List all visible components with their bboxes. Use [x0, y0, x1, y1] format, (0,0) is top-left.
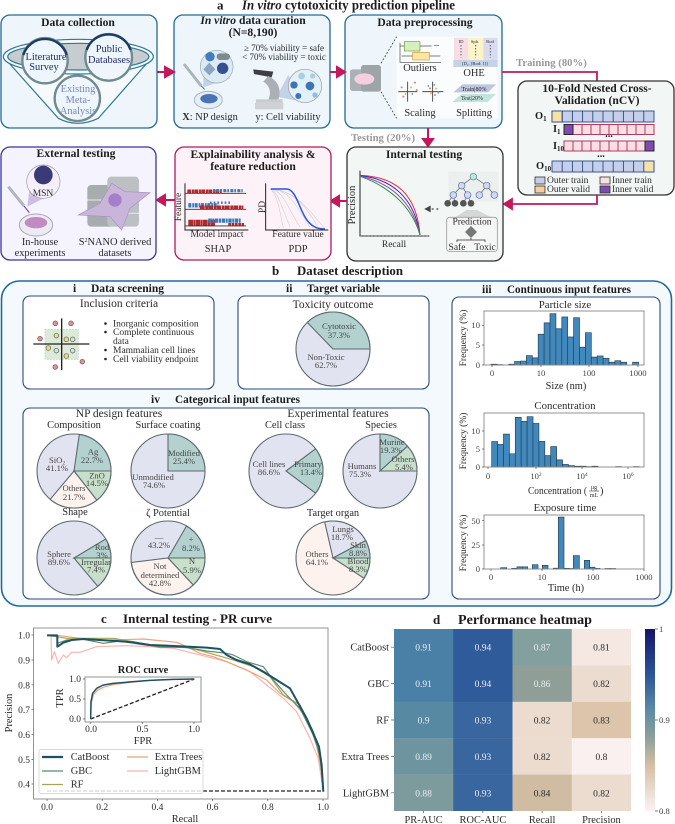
panel: toxicity outcome: Toxicity outcome: [293, 299, 373, 311]
pie: shape: Sphere: [47, 549, 71, 559]
panel: inclusion criteria: [23, 296, 214, 389]
pie: zeta potential: N: [189, 556, 196, 566]
chart: PR curve: 0.4: [18, 780, 30, 790]
chart: ROC inset: 0.0: [85, 725, 97, 735]
nCV legend: Inner train: [612, 176, 652, 186]
panel: explainability analysis: Feature value: [272, 230, 324, 240]
heading: categorical input features: Categorical input features: [175, 394, 301, 406]
heatmap values: [415, 644, 610, 800]
pie: zeta potential: 42.8%: [149, 578, 171, 588]
legend: PR models: [39, 750, 203, 794]
criteria list: Cell viability endpoint: [113, 355, 199, 365]
heatmap values: 0.89: [415, 753, 432, 763]
panel: toxicity outcome: [238, 296, 429, 389]
chart: ROC inset: ROC curve: [118, 665, 169, 676]
panel: data preprocessing: [D₁, [Rod: 1]]: [462, 61, 488, 67]
pie: cell class: Cell class: [265, 420, 305, 431]
panel: internal testing: Internal testing: [386, 148, 462, 161]
heatmap values: 0.91: [415, 680, 432, 690]
icon: MSN particle, syringe and dish: [8, 165, 60, 236]
criteria list: Inorganic composition: [113, 320, 199, 330]
panel: explainability analysis: Model impact: [190, 230, 244, 240]
pie: composition: Others: [63, 483, 86, 493]
chart: PR curve: 0.2: [96, 803, 108, 813]
fold bars: [552, 111, 654, 172]
heatmap values: 0.82: [534, 716, 551, 726]
icon: microscope with cells: [253, 69, 322, 109]
panel: data preprocessing: Data preprocessing: [377, 16, 473, 29]
heatmap values: 0.86: [534, 680, 551, 690]
chart: PR curve: 0.6: [18, 731, 30, 741]
panel: data preprocessing: OHE: [463, 68, 485, 79]
panel: nested cross-validation: I: [553, 141, 557, 152]
panel: explainability analysis: Feature: [174, 193, 184, 221]
pie: target organ: 8.3%: [349, 564, 367, 574]
pie: zeta potential: 8.2%: [182, 543, 200, 553]
pie: surface coating: Unmodified: [132, 472, 174, 482]
heatmap values: 0.8: [595, 753, 608, 763]
heatmap values: 0.82: [534, 753, 551, 763]
panel: external testing: NANO derived: [88, 237, 152, 248]
chart: PR curve: 0.6: [207, 803, 219, 813]
label: testing: Testing (20%): [351, 132, 415, 144]
arrow: collection to curation: [157, 67, 174, 77]
heatmap axis labels: CatBoost: [350, 642, 389, 654]
chart: particle size histogram: 5: [476, 340, 480, 350]
legend: PR models: GBC: [71, 766, 92, 777]
chart: exposure time histogram: 0: [476, 564, 480, 574]
chart: particle size histogram: 10: [537, 368, 545, 378]
pie: target organ: 18.7%: [331, 532, 353, 542]
panel: categorical pies: NP design features: [76, 408, 163, 420]
chart: performance heatmap: d: [433, 612, 441, 627]
chart: concentration histogram: 10: [576, 471, 585, 481]
icon: nanoparticles, syringe and dish: [184, 50, 233, 109]
heading: continuous input features: iii: [482, 284, 492, 296]
panel: external testing: datasets: [99, 248, 131, 259]
panel: nested cross-validation: 1: [557, 128, 561, 136]
prediction box: Prediction: [452, 218, 492, 228]
chart: PR curve: Precision: [4, 693, 15, 732]
panel: data preprocessing: Scaling: [404, 108, 436, 119]
panel: data preprocessing: Rod: [486, 39, 495, 44]
chart: exposure time histogram: 25: [471, 540, 480, 550]
arrow: curation to preprocessing: [330, 67, 345, 77]
panel: external testing: In-house: [22, 237, 59, 248]
pie: composition: [37, 420, 111, 508]
criteria list: [104, 320, 199, 365]
heatmap colorbar: 1: [659, 624, 663, 634]
legend: PR models: LightGBM: [155, 766, 201, 777]
pie: zeta potential: 5.9%: [183, 565, 201, 575]
chart: concentration histogram: 2: [539, 472, 542, 478]
pie: shape: 7.4%: [87, 564, 105, 574]
criteria list: Mammalian cell lines: [113, 346, 196, 356]
panel: explainability analysis: [174, 147, 331, 260]
chart: PR curve: 0.4: [151, 803, 164, 813]
section b title: b: [272, 263, 279, 278]
panel: data collection: Analysis: [60, 106, 96, 117]
pie: target organ: Skin: [350, 540, 367, 550]
pie: species: 19.3%: [380, 445, 402, 455]
arrow: explainability to external testing: [157, 195, 175, 205]
panel: continuous histograms: [452, 297, 660, 599]
pie: target organ: [296, 508, 370, 595]
pie: target organ: Target organ: [307, 508, 360, 519]
icon: database with cell: [78, 177, 150, 230]
chart: particle size histogram: [458, 299, 647, 392]
chart: concentration histogram: μg: [591, 485, 597, 491]
chart: ROC inset: 0.5: [137, 725, 149, 735]
chart: concentration histogram: 5: [476, 444, 480, 454]
pie: species: Humans: [348, 461, 377, 471]
chart: concentration histogram: 0: [486, 471, 490, 481]
chart: particle size histogram: 1000: [629, 368, 647, 378]
panel: external testing: 2: [84, 238, 88, 244]
chart: ROC inset: FPR: [134, 736, 152, 747]
icon: screening scatter: [33, 318, 89, 370]
panel: external testing: External testing: [37, 147, 116, 160]
panel: in vitro data curation: y: Cell viability: [255, 112, 321, 123]
chart: concentration histogram: 10: [471, 426, 480, 436]
chart: PR curve: 1.0: [18, 632, 30, 642]
chart: concentration histogram: 0: [476, 462, 480, 472]
pie: target organ: Lungs: [332, 524, 354, 534]
pie: composition: 2: [62, 460, 65, 466]
chart: particle size histogram: 10: [471, 320, 480, 330]
chart: concentration histogram: [458, 400, 644, 499]
panel: data preprocessing: Test|20%: [461, 96, 483, 102]
panel: nested cross-validation: 10: [557, 145, 565, 153]
panel: categorical pies: [23, 408, 429, 599]
pie: toxicity outcome: Cytotoxic: [322, 321, 356, 331]
pie: shape: [37, 507, 111, 595]
panel: data preprocessing: [345, 15, 502, 128]
pie: surface coating: Modified: [168, 448, 201, 458]
heatmap values: 0.91: [415, 644, 432, 654]
chart: ROC inset: [55, 665, 201, 747]
arrow: internal testing to explainability: [331, 196, 347, 206]
chart: concentration histogram: 10: [622, 471, 631, 481]
pie: composition: Ag: [88, 446, 99, 456]
prediction box: Toxic: [474, 243, 496, 253]
chart: concentration histogram: Concentration (: [528, 486, 587, 497]
chart: concentration histogram: 6: [631, 472, 634, 478]
heatmap axis labels: RF: [376, 716, 389, 726]
pie: toxicity outcome: 62.7%: [315, 360, 337, 370]
prediction box: Safe: [449, 242, 465, 253]
pie: composition: 41.1%: [46, 463, 68, 473]
panel: data preprocessing: Outliers: [403, 63, 437, 74]
chart: PR curve: c: [101, 611, 107, 626]
panel: in vitro data curation: ≥ 70% viability = safe: [244, 43, 324, 53]
heading: categorical input features: iv: [151, 394, 160, 406]
pie: species: 5.4%: [395, 462, 413, 472]
nCV legend: Outer train: [547, 176, 589, 186]
heatmap colorbar: [645, 624, 670, 816]
pie: composition: 22.7%: [81, 455, 103, 465]
pie: surface coating: 74.6%: [143, 480, 165, 490]
pie: species: [343, 420, 417, 508]
heatmap values: 0.93: [475, 753, 491, 763]
pie: species: Murine: [379, 437, 405, 447]
heatmap values: 0.82: [593, 680, 610, 690]
nCV legend: Inner valid: [612, 185, 654, 195]
heatmap colorbar: 0.8: [659, 806, 670, 816]
heading: data screening: Data screening: [91, 283, 164, 295]
pie: surface coating: [131, 420, 205, 508]
arrow: nCV to internal testing: [504, 195, 597, 209]
panel: explainability analysis: SHAP: [205, 244, 231, 255]
panel: nested cross-validation: ...: [597, 149, 605, 160]
panel: nested cross-validation: Validation (nCV): [555, 94, 640, 107]
chart: concentration histogram: 4: [585, 472, 588, 478]
pie: shape: Rod: [95, 542, 110, 552]
pie: cell class: Primary: [294, 459, 323, 469]
chart: exposure time histogram: Frequency (%): [458, 515, 469, 571]
panel: inclusion criteria: Inclusion criteria: [80, 298, 158, 310]
panel: nested cross-validation: O: [535, 111, 543, 122]
heading: continuous input features: Continuous input features: [507, 284, 632, 296]
chart: PR curve: 0.7: [18, 706, 30, 716]
pie: zeta potential: —: [154, 532, 164, 542]
criteria list: Complete continuous: [113, 328, 194, 338]
panel: external testing: [1, 147, 156, 260]
heatmap axis labels: Extra Trees: [341, 752, 389, 763]
heatmap values: 0.94: [475, 680, 491, 690]
panel: data preprocessing: Splitting: [456, 108, 492, 119]
pie: shape: Shape: [62, 507, 88, 518]
chart: exposure time histogram: 10: [538, 572, 546, 582]
pie: zeta potential: Not: [154, 561, 167, 571]
chart: exposure time histogram: Time (h): [548, 583, 584, 594]
panel: data collection: Public: [96, 44, 123, 55]
pie: target organ: Blood: [347, 556, 369, 566]
chart: particle size histogram: Frequency (%): [458, 310, 469, 366]
chart: particle size histogram: Particle size: [539, 299, 591, 311]
chart: ROC inset: 1.0: [188, 725, 200, 735]
chart: schematic PR curves: [360, 171, 429, 236]
chart: ROC inset: 0.5: [69, 695, 81, 705]
chart: PR curve: 0.0: [41, 803, 53, 813]
chart: particle size histogram: 0: [476, 360, 480, 370]
chart: exposure time histogram: Exposure time: [534, 502, 597, 514]
heatmap axis labels: GBC: [368, 679, 389, 690]
pie: composition: SiO: [49, 455, 62, 465]
panel: external testing: MSN: [33, 189, 53, 199]
heatmap axis labels: [341, 642, 622, 824]
pie: species: Species: [365, 420, 397, 431]
chart: PR curve: 0.5: [18, 756, 30, 766]
heatmap values: 0.83: [593, 716, 610, 726]
nCV legend: Outer valid: [547, 185, 590, 195]
icon: splitting planes: [452, 84, 496, 102]
nCV legend: [535, 176, 654, 195]
panel: nested cross-validation: I: [553, 124, 557, 135]
panel: data collection: [1, 15, 157, 128]
heatmap axis labels: LightGBM: [343, 788, 389, 800]
chart: PR curve: Internal testing - PR curve: [123, 611, 272, 626]
heatmap values: 0.94: [475, 644, 491, 654]
panel: data collection: Existing: [61, 84, 95, 95]
icon: funnel of sources: [3, 34, 153, 123]
chart: exposure time histogram: 50: [471, 516, 480, 526]
panel: external testing: experiments: [15, 248, 65, 259]
pie: shape: 89.6%: [48, 557, 70, 567]
legend: PR models: Extra Trees: [155, 752, 202, 763]
chart: exposure time histogram: [458, 502, 653, 594]
chart: performance heatmap: [341, 612, 670, 824]
icon: decision tree model: [426, 172, 498, 217]
pie: zeta potential: 43.2%: [148, 540, 170, 550]
chart: exposure time histogram: 0: [489, 572, 493, 582]
panel: dataset description: [2, 281, 672, 606]
heading: target variable: Target variable: [307, 283, 380, 295]
panel: nested cross-validation: 1: [543, 115, 547, 123]
section b title: Dataset description: [297, 263, 404, 278]
pie: target organ: 8.8%: [349, 548, 367, 558]
chart: concentration histogram: Concentration: [534, 400, 596, 412]
panel: in vitro data curation: [174, 14, 330, 128]
panel: data preprocessing: Sph.: [471, 39, 479, 44]
panel: in vitro data curation: In vitro data curation: [199, 14, 306, 27]
legend: PR models: CatBoost: [71, 752, 109, 763]
icon: scaling scatter: [398, 82, 443, 102]
heatmap values: 0.9: [418, 716, 430, 726]
pie: species: Others: [392, 454, 415, 464]
heatmap colorbar: 0.9: [659, 715, 670, 725]
connector: training split: [502, 72, 597, 81]
panel: internal testing: Precision: [347, 185, 358, 224]
heatmap cells: [394, 629, 631, 811]
pie: target organ: 64.1%: [306, 557, 328, 567]
chart: PR curve: 1.0: [317, 803, 329, 813]
chart: concentration histogram: Frequency (%): [458, 413, 469, 469]
chart: PR curve: 0.8: [262, 803, 274, 813]
pie: zeta potential: +: [189, 534, 194, 544]
chart: PR curve: 0.9: [18, 656, 30, 666]
panel: in vitro data curation: < 70% viability = toxic: [242, 52, 326, 62]
panel: nested cross-validation: 10: [544, 165, 552, 173]
arrow: preprocessing to internal testing: [423, 128, 433, 146]
heading: data screening: i: [73, 283, 77, 295]
pie: zeta potential: [131, 508, 205, 595]
panel: data collection: Survey: [29, 62, 60, 73]
panel: data collection: Meta-: [66, 95, 91, 106]
pie: composition: 14.5%: [86, 478, 108, 488]
heatmap values: 0.82: [593, 790, 610, 800]
chart: concentration histogram: 10: [530, 471, 539, 481]
panel: data preprocessing: ID: [459, 39, 464, 44]
criteria list: data: [113, 337, 130, 347]
panel: in vitro data curation: (N=8,190): [229, 26, 278, 39]
label: training: Training (80%): [516, 57, 587, 69]
chart: PR curve: [4, 611, 329, 824]
pie: cell class: 86.6%: [258, 467, 280, 477]
panel: internal testing: [347, 147, 503, 261]
panel: data collection: Data collection: [41, 16, 115, 29]
chart: exposure time histogram: 100: [587, 572, 599, 582]
pie: composition: 21.7%: [63, 492, 85, 502]
pie: composition: Composition: [47, 420, 102, 431]
chart: performance heatmap: Performance heatmap: [458, 613, 592, 628]
chart: particle size histogram: Size (nm): [546, 381, 586, 392]
chart: SHAP schematic: [185, 183, 248, 230]
panel: data collection: Databases: [88, 55, 130, 66]
panel: nested cross-validation: [518, 81, 674, 195]
heading: target variable: ii: [286, 283, 293, 295]
panel: explainability analysis: PD: [258, 201, 268, 213]
pie: shape: Irregular: [81, 557, 111, 567]
pie: toxicity outcome: 37.3%: [328, 330, 350, 340]
pie: species: 75.3%: [349, 469, 371, 479]
panel: nested cross-validation: 10-Fold Nested Cross-: [542, 82, 652, 95]
heatmap values: 0.88: [415, 790, 432, 800]
chart: exposure time histogram: 1000: [635, 572, 653, 582]
panel: explainability analysis: PDP: [288, 244, 308, 255]
panel: in vitro data curation: X: NP design: [182, 112, 239, 123]
panel: nested cross-validation: O: [536, 161, 544, 172]
pie: toxicity outcome: Non-Toxic: [307, 352, 345, 362]
panel: explainability analysis: feature reduction: [210, 160, 296, 173]
heatmap values: 0.93: [475, 790, 491, 800]
pie: composition: ZnO: [89, 470, 105, 480]
pie: zeta potential: ζ Potential: [146, 508, 190, 519]
chart: ROC inset: TPR: [55, 688, 66, 708]
chart: particle size histogram: 100: [583, 368, 595, 378]
pie: target organ: Others: [306, 549, 329, 559]
chart: PDP schematic: [266, 183, 328, 230]
icon: outliers boxplots: [400, 42, 441, 62]
panel: categorical pies: Experimental features: [287, 408, 389, 420]
icon: database and white inset: [350, 37, 498, 118]
icon: one-hot encoding table: [453, 38, 498, 67]
panel: nested cross-validation: ...: [605, 129, 613, 140]
chart: particle size histogram: 0: [490, 368, 494, 378]
legend: PR models: RF: [71, 780, 84, 790]
prediction box: [447, 217, 497, 253]
pie: cell class: 13.4%: [300, 467, 322, 477]
pie: zeta potential: determined: [141, 570, 180, 580]
panel: data preprocessing: Train|80%: [462, 87, 486, 93]
heatmap values: 0.84: [534, 790, 551, 800]
panel: internal testing: Recall: [382, 240, 406, 250]
panel: external testing: S: [79, 237, 84, 248]
pie: shape: 3%: [96, 550, 108, 560]
pie: surface coating: Surface coating: [136, 420, 200, 431]
heatmap values: 0.93: [475, 716, 491, 726]
chart: concentration histogram: mL: [590, 493, 598, 499]
pie: cell class: Cell lines: [253, 459, 286, 469]
pie: cell class: [249, 420, 323, 508]
PR curve lines: [47, 635, 323, 792]
heatmap values: 0.81: [593, 644, 610, 654]
chart: PR curve: 0.8: [18, 681, 30, 691]
heatmap values: 0.87: [534, 644, 551, 654]
pie: surface coating: 25.4%: [173, 456, 195, 466]
pie: toxicity outcome: [296, 312, 370, 386]
panel: explainability analysis: Explainability analysis &: [190, 148, 316, 161]
panel: data collection: Literature: [26, 52, 67, 63]
chart: ROC inset: 0.0: [69, 715, 81, 725]
chart: ROC inset: 1.0: [69, 675, 81, 685]
chart: concentration histogram: ): [600, 486, 603, 497]
